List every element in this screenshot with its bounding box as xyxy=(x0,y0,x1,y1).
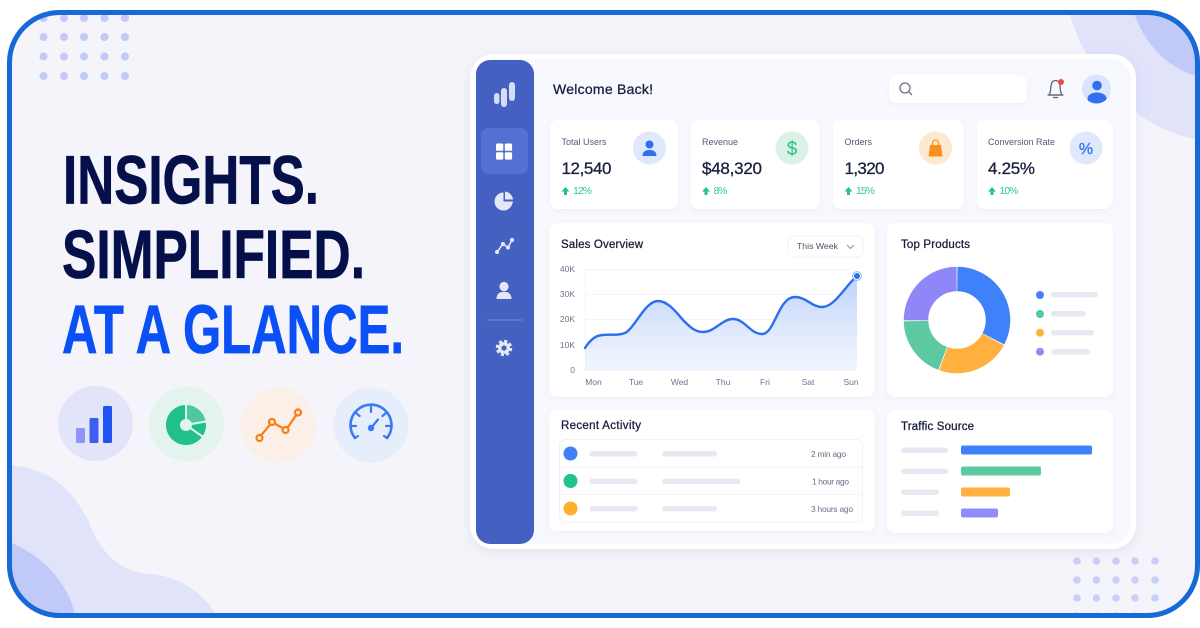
icon: line trend xyxy=(240,388,316,462)
horizontal bar chart xyxy=(901,446,1092,518)
line chart: 10K xyxy=(560,340,575,350)
icon: pie chart xyxy=(149,386,224,462)
icon: logo xyxy=(494,82,515,107)
line chart: Tue xyxy=(629,377,643,387)
activity list: 3 hours ago xyxy=(811,504,853,514)
line chart: Sun xyxy=(843,377,859,387)
panel: dashboard xyxy=(470,54,1136,549)
active nav item xyxy=(481,128,528,174)
line chart: Fri xyxy=(760,377,770,387)
panel: traffic source xyxy=(887,410,1113,533)
stat card: revenue: $48,320 xyxy=(702,159,762,178)
line chart: 0 xyxy=(570,365,575,375)
panel: sales overview xyxy=(549,223,875,397)
dropdown xyxy=(788,236,863,257)
line chart: Mon xyxy=(585,377,602,387)
stat card: orders xyxy=(833,120,964,209)
stat card: conversion rate xyxy=(977,120,1113,209)
heading: traffic source: Traffic Source xyxy=(901,421,974,433)
line chart: Sat xyxy=(802,377,815,387)
line chart: 40K xyxy=(560,264,575,274)
legend xyxy=(1036,291,1098,356)
activity list xyxy=(560,440,862,522)
panel: recent activity xyxy=(549,410,875,531)
stat card: revenue: 8% xyxy=(714,185,728,197)
panel: top products xyxy=(887,223,1113,397)
stat card: total users: 12,540 xyxy=(562,159,612,178)
icon: nav user xyxy=(496,282,512,299)
activity list: 1 hour ago xyxy=(812,476,849,486)
icon: gauge xyxy=(334,388,408,462)
heading: welcome: Welcome Back! xyxy=(553,81,653,97)
stat card: conversion rate: Conversion Rate xyxy=(988,137,1055,147)
stat card: total users: 12% xyxy=(573,185,592,197)
activity list: 2 min ago xyxy=(811,449,846,459)
stat card: conversion rate: 10% xyxy=(1000,185,1018,197)
stat card: orders: 15% xyxy=(856,185,875,197)
headline xyxy=(62,142,404,368)
line chart: Wed xyxy=(671,377,688,387)
icon: nav line xyxy=(496,239,513,253)
headline: INSIGHTS. xyxy=(63,142,319,218)
stat card: orders: 1,320 xyxy=(844,159,884,178)
stat card: total users xyxy=(550,120,678,209)
dropdown: This Week xyxy=(797,241,839,251)
line chart: 20K xyxy=(560,314,575,324)
stat card: conversion rate: 4.25% xyxy=(988,159,1035,178)
stat card: revenue: Revenue xyxy=(702,137,738,147)
line chart xyxy=(560,264,861,387)
stat card: conversion rate: % xyxy=(1079,141,1093,158)
heading: top products: Top Products xyxy=(901,239,970,251)
line chart: 30K xyxy=(560,289,575,299)
search box xyxy=(889,75,1027,103)
line chart: Thu xyxy=(716,377,731,387)
icon row xyxy=(58,386,408,462)
headline: SIMPLIFIED. xyxy=(62,216,365,293)
donut chart xyxy=(916,279,998,361)
icon: nav pie xyxy=(495,192,513,210)
heading: sales overview: Sales Overview xyxy=(561,239,644,251)
stat card: revenue: $ xyxy=(787,139,798,160)
stat card: total users: Total Users xyxy=(562,137,607,147)
icon: bar chart xyxy=(58,386,133,461)
headline: AT A GLANCE. xyxy=(62,291,404,368)
heading: recent activity: Recent Activity xyxy=(561,420,641,432)
icon: avatar xyxy=(1082,74,1111,104)
sidebar xyxy=(476,60,534,544)
stat card: revenue xyxy=(691,120,820,209)
stat card: orders: Orders xyxy=(844,137,873,147)
icon: nav gear xyxy=(497,341,511,355)
icon: bell xyxy=(1048,79,1064,98)
